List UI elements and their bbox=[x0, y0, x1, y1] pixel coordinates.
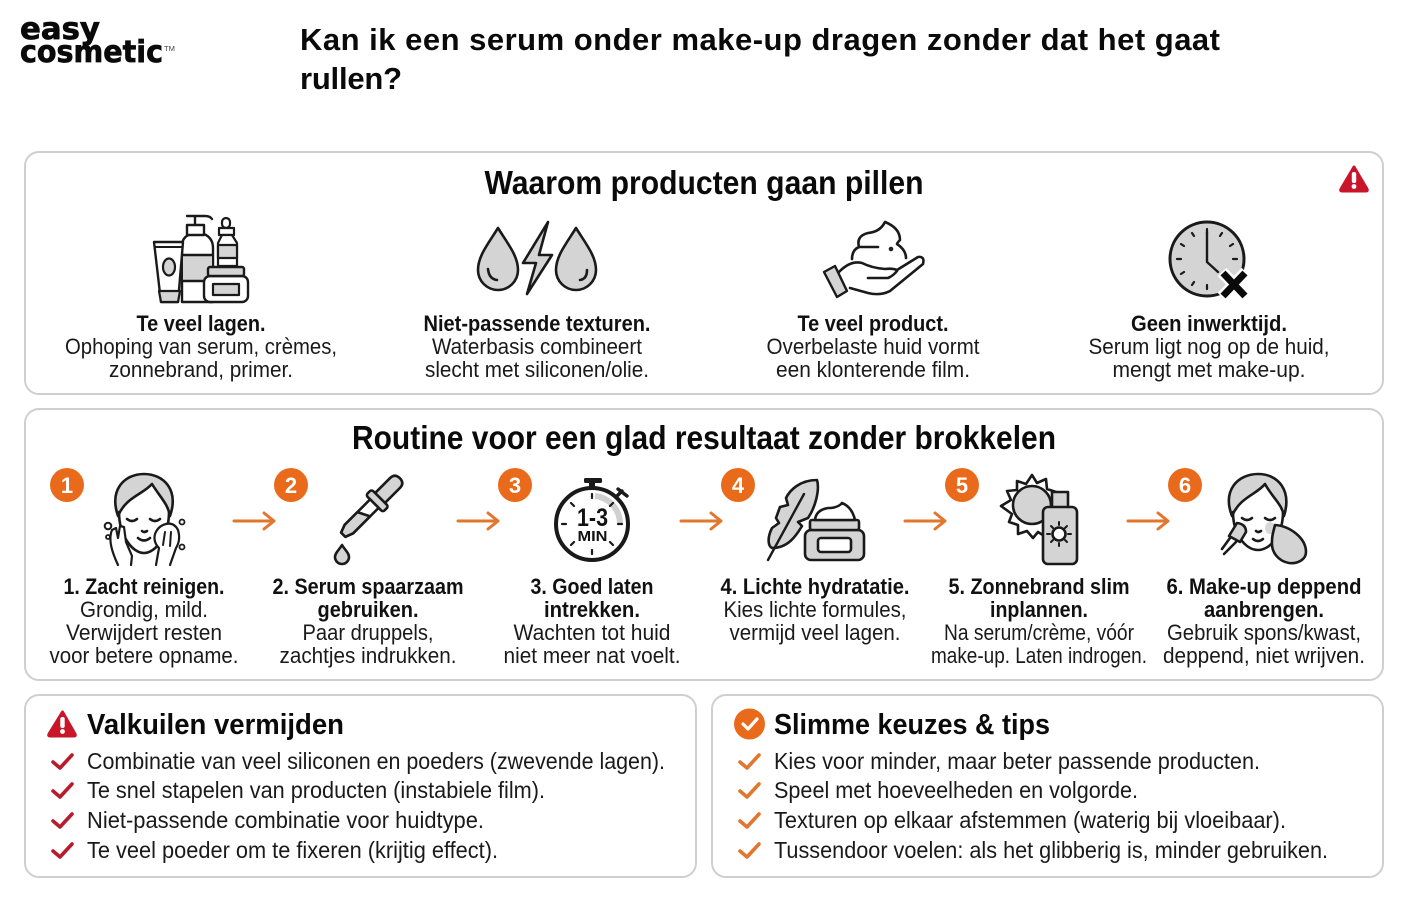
text: te veel product: Overbelaste huid vormt bbox=[766, 334, 980, 359]
logo: easy cosmetic bbox=[20, 12, 175, 70]
text: niet-passende texturen: slecht met siliconen/olie. bbox=[425, 357, 649, 382]
badge 5: 5 bbox=[956, 473, 968, 498]
arrow 3 bbox=[681, 513, 721, 529]
text: geen inwerktijd: mengt met make-up. bbox=[1112, 357, 1306, 382]
text: niet-passende texturen: Waterbasis combineert bbox=[432, 334, 642, 359]
text: step 2: gebruiken. bbox=[318, 597, 418, 622]
list: tips: Tussendoor voelen: als het glibberig is, minder gebruiken. bbox=[774, 837, 1328, 863]
text: te veel lagen bbox=[65, 311, 337, 382]
icon: face cleansing bbox=[105, 474, 184, 565]
text: step 3: intrekken. bbox=[544, 597, 640, 622]
text: step 4: vermijd veel lagen. bbox=[730, 620, 900, 645]
text: step 1: Verwijdert resten bbox=[66, 620, 222, 645]
text: step 4 bbox=[720, 574, 910, 645]
list: tips: Texturen op elkaar afstemmen (waterig bij vloeibaar). bbox=[774, 807, 1286, 833]
logo: easy cosmetic: easy bbox=[20, 12, 100, 47]
heading: routine voor een glad resultaat: Routine voor een glad resultaat zonder brokkelen bbox=[352, 419, 1056, 456]
panel: waarom producten gaan pillen bbox=[25, 152, 1383, 394]
list: valkuilen bbox=[53, 748, 665, 863]
text: geen inwerktijd: Serum ligt nog op de huid, bbox=[1088, 334, 1330, 359]
text: step 2: Paar druppels, bbox=[302, 620, 434, 645]
icon: feather and cream jar bbox=[768, 480, 864, 560]
text: step 3: niet meer nat voelt. bbox=[504, 643, 680, 668]
panel: slimme keuzes en tips bbox=[712, 695, 1383, 877]
text: te veel product: een klonterende film. bbox=[776, 357, 970, 382]
text: step 3 bbox=[504, 574, 680, 668]
heading: waarom producten gaan pillen: Waarom producten gaan pillen bbox=[484, 164, 924, 201]
icon: orange check circle bbox=[734, 708, 765, 740]
text: step 5: Na serum/crème, vóór bbox=[944, 620, 1134, 645]
text: step 1: voor betere opname. bbox=[50, 643, 238, 668]
text: step 5: inplannen. bbox=[990, 597, 1088, 622]
text: step 3: Wachten tot huid bbox=[514, 620, 670, 645]
text: step 2 bbox=[272, 574, 464, 668]
icon: clock with cross bbox=[1170, 222, 1246, 297]
panel: routine bbox=[25, 409, 1383, 680]
text: step 4: 4. Lichte hydratatie. bbox=[720, 574, 910, 599]
text: step 1: 1. Zacht reinigen. bbox=[64, 574, 224, 599]
text: step 3: 3. Goed laten bbox=[530, 574, 654, 599]
badge 2: 2 bbox=[285, 473, 297, 498]
arrow 1 bbox=[234, 513, 274, 529]
list: valkuilen: Combinatie van veel siliconen en poeders (zwevende lagen). bbox=[87, 748, 665, 774]
title: rullen? bbox=[300, 61, 402, 96]
text: step 1 bbox=[50, 574, 238, 668]
text: niet-passende texturen bbox=[424, 311, 650, 382]
text: step 6: deppend, niet wrijven. bbox=[1163, 643, 1365, 668]
badge 4 bbox=[721, 468, 755, 502]
logo: easy cosmetic: cosmetic bbox=[20, 35, 163, 70]
text: step 6: aanbrengen. bbox=[1204, 597, 1324, 622]
badge 6: 6 bbox=[1179, 473, 1191, 498]
text: te veel lagen: zonnebrand, primer. bbox=[109, 357, 293, 382]
icon: warning triangle bbox=[49, 712, 75, 736]
list: valkuilen: Te veel poeder om te fixeren (krijtig effect). bbox=[87, 837, 498, 863]
text: step 4: Kies lichte formules, bbox=[724, 597, 906, 622]
arrow 5 bbox=[1128, 513, 1168, 529]
icon: red warning triangle bbox=[1341, 167, 1367, 191]
text: step 6: 6. Make-up deppend bbox=[1166, 574, 1362, 599]
badge 1: 1 bbox=[61, 473, 73, 498]
badge 3: 3 bbox=[509, 473, 521, 498]
text: geen inwerktijd bbox=[1088, 311, 1330, 382]
text: step 1: Grondig, mild. bbox=[80, 597, 208, 622]
text: step 5: make-up. Laten indrogen. bbox=[931, 643, 1147, 668]
text: te veel product bbox=[766, 311, 980, 382]
arrow 4 bbox=[905, 513, 945, 529]
text: step 5 bbox=[931, 574, 1147, 668]
text: te veel product: Te veel product. bbox=[798, 311, 948, 336]
text: step 2: 2. Serum spaarzaam bbox=[272, 574, 464, 599]
text: niet-passende texturen: Niet-passende texturen. bbox=[424, 311, 650, 336]
list: tips bbox=[740, 748, 1328, 863]
text: te veel lagen: Ophoping van serum, crèmes, bbox=[65, 334, 337, 359]
badge 1 bbox=[50, 468, 84, 502]
icon: hand with cream bbox=[824, 222, 923, 297]
badge 4: 4 bbox=[732, 473, 745, 498]
icon: skincare bottles bbox=[154, 216, 248, 302]
text: geen inwerktijd: Geen inwerktijd. bbox=[1131, 311, 1287, 336]
list: valkuilen: Te snel stapelen van producten (instabiele film). bbox=[87, 777, 545, 803]
heading: valkuilen vermijden: Valkuilen vermijden bbox=[87, 709, 344, 741]
icon: sun and sunscreen bbox=[1001, 475, 1077, 564]
text: step 2: zachtjes indrukken. bbox=[280, 643, 456, 668]
badge 6 bbox=[1168, 468, 1202, 502]
list: valkuilen: Niet-passende combinatie voor huidtype. bbox=[87, 807, 484, 833]
icon: dropper bbox=[335, 470, 408, 564]
text: step 6 bbox=[1163, 574, 1365, 668]
text: te veel lagen: Te veel lagen. bbox=[136, 311, 266, 336]
badge 2 bbox=[274, 468, 308, 502]
title bbox=[300, 22, 1220, 96]
icon: face with brush and sponge bbox=[1222, 474, 1306, 563]
arrow 2 bbox=[458, 513, 498, 529]
heading: slimme keuzes en tips: Slimme keuzes & tips bbox=[774, 709, 1050, 741]
icon: water drops and lightning bbox=[478, 222, 596, 294]
text: step 5: 5. Zonnebrand slim bbox=[948, 574, 1130, 599]
icon: stopwatch 1-3 min: 1-3 bbox=[577, 504, 608, 532]
icon: stopwatch 1-3 min bbox=[556, 478, 628, 560]
title: Kan ik een serum onder make-up dragen zonder dat het gaat bbox=[300, 22, 1220, 57]
panel: valkuilen vermijden bbox=[25, 695, 696, 877]
text: step 6: Gebruik spons/kwast, bbox=[1167, 620, 1361, 645]
list: tips: Kies voor minder, maar beter passende producten. bbox=[774, 748, 1260, 774]
badge 5 bbox=[945, 468, 979, 502]
badge 3 bbox=[498, 468, 532, 502]
logo: easy cosmetic: TM bbox=[164, 46, 175, 53]
icon: stopwatch 1-3 min: MIN bbox=[578, 528, 608, 545]
list: tips: Speel met hoeveelheden en volgorde. bbox=[774, 777, 1138, 803]
